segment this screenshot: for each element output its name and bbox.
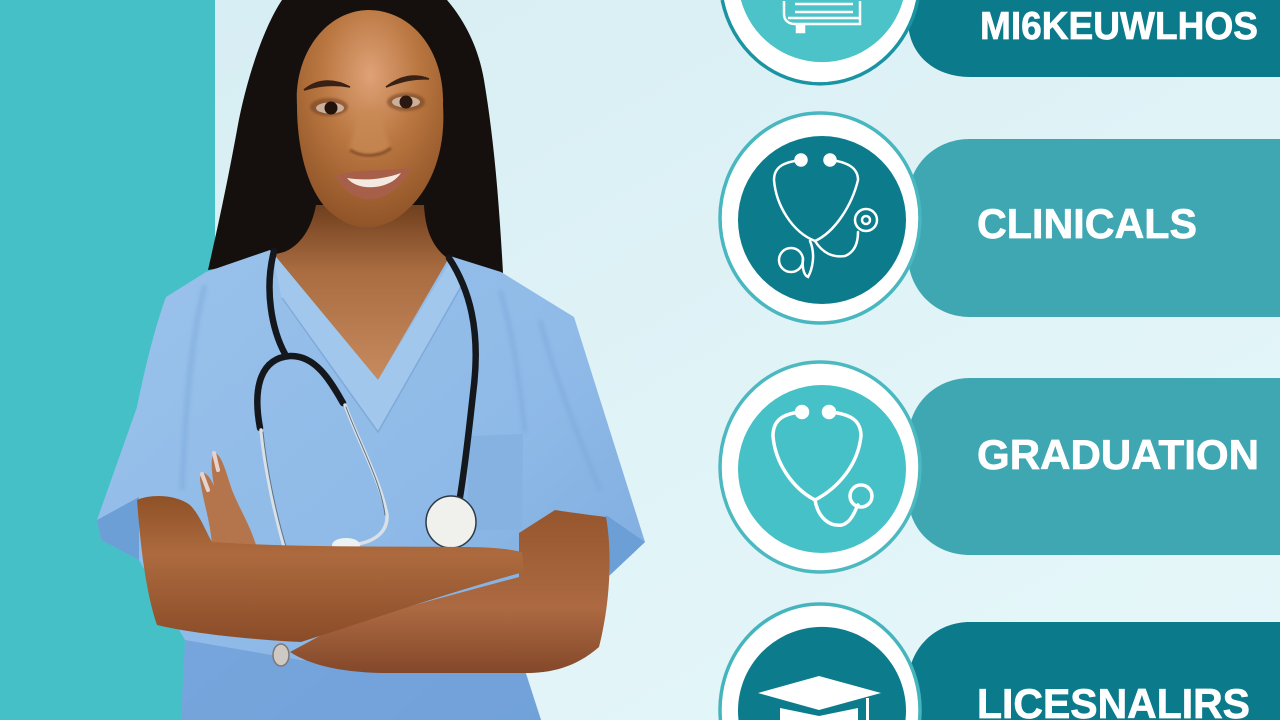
lower tube [803, 232, 858, 277]
lips [336, 168, 410, 199]
icon: stethoscope outline [773, 406, 872, 525]
bracelet [273, 644, 289, 666]
right eye socket shade [387, 93, 425, 111]
book cover [784, 1, 860, 24]
label 1: MI6KEUWLHOS [980, 5, 1258, 48]
tassel [866, 698, 869, 720]
badge ring 4 [720, 604, 920, 720]
left eye [310, 98, 348, 116]
lower tube [815, 500, 858, 525]
arc tube [257, 356, 343, 428]
badge disc 3 [738, 385, 906, 553]
chest piece [855, 209, 877, 231]
pill 2 [908, 139, 1280, 317]
label 2: CLINICALS [977, 200, 1197, 247]
sleeve hem shade [97, 497, 645, 575]
step 1: scrolled badge and pill [722, 0, 1280, 84]
badge ring 3 [720, 362, 920, 572]
chest piece [332, 538, 360, 552]
ear tips [796, 154, 806, 166]
label 3: GRADUATION [977, 431, 1259, 478]
right tube [449, 258, 476, 497]
right eye [387, 93, 425, 111]
ear tip right [824, 154, 836, 166]
right eyebrow [386, 76, 429, 87]
pill 3 [908, 378, 1280, 555]
ear tip right [824, 406, 834, 418]
collar seam [282, 285, 462, 432]
loop [779, 248, 803, 272]
badge disc 2 [738, 136, 906, 304]
nails [202, 453, 218, 490]
neck [268, 205, 460, 392]
teeth [347, 173, 401, 187]
icon: book [784, 1, 860, 32]
step 4: licensure [720, 604, 1280, 720]
left eye white [316, 102, 344, 114]
icon: stethoscope [774, 154, 877, 277]
left eyebrow [304, 81, 350, 90]
silver tube [261, 405, 387, 550]
tube [773, 412, 861, 500]
bookmark [797, 24, 804, 32]
icon: graduation cap [758, 676, 881, 720]
badge ring 1 [722, 0, 918, 84]
left iris [324, 102, 338, 114]
stethoscope [257, 251, 476, 552]
fabric folds [182, 285, 600, 490]
nostril shade [350, 148, 391, 155]
right arm [290, 510, 610, 673]
lower body shade [181, 640, 541, 720]
chest piece [850, 485, 872, 507]
chest pocket [468, 434, 523, 530]
nurse portrait [97, 0, 645, 720]
nose [349, 108, 391, 157]
left tube [270, 251, 285, 354]
torso and sleeves [97, 250, 645, 720]
hand [200, 452, 256, 545]
step 3: graduation [720, 362, 1280, 572]
earpieces [774, 160, 858, 241]
mortarboard [758, 676, 881, 710]
panel: teal left band [0, 0, 215, 720]
badge ring 2 [720, 113, 920, 323]
face shape [297, 10, 443, 228]
left arm [137, 496, 524, 642]
face [297, 10, 443, 228]
chest piece centre [862, 216, 870, 224]
collar band [272, 252, 462, 432]
pill 4 [908, 622, 1280, 720]
cap base [780, 708, 858, 720]
scrub top [97, 250, 645, 720]
diaphragm disc [426, 496, 476, 548]
right eye white [392, 96, 420, 108]
ear tips [796, 406, 808, 418]
book pages [788, 4, 860, 18]
left eye socket shade [310, 98, 348, 116]
silver tube outline [263, 407, 385, 550]
fingers [200, 452, 256, 545]
badge disc 1 [741, 0, 903, 62]
pill 1 [908, 0, 1280, 77]
step 2: clinicals [720, 113, 1280, 323]
hair [208, 0, 503, 273]
right iris [400, 96, 412, 108]
badge disc 4 [738, 627, 906, 720]
